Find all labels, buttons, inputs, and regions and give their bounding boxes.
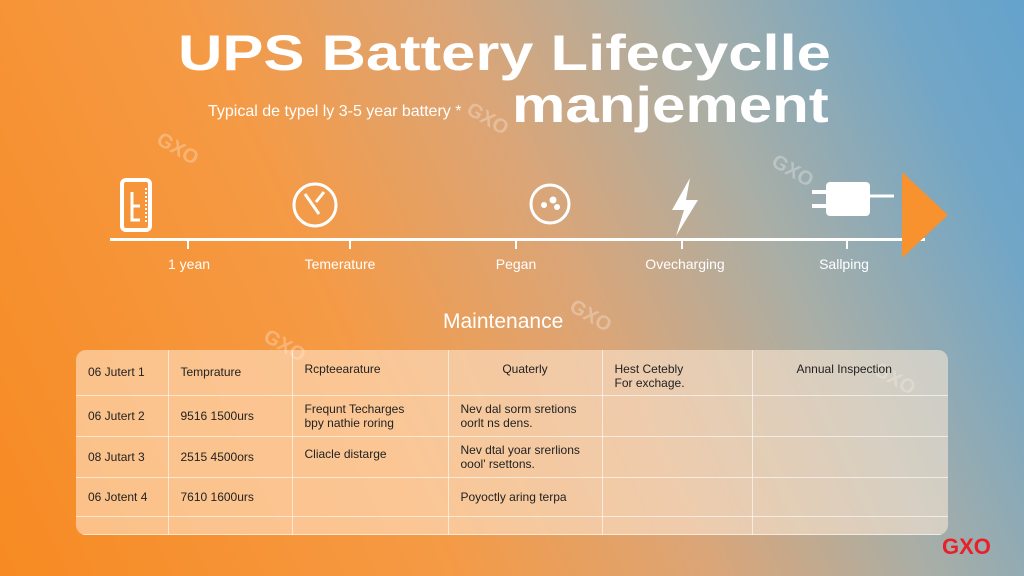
icon: lightning xyxy=(672,178,698,236)
maintenance table: Temprature xyxy=(180,365,241,379)
maintenance table: oorlt ns dens. xyxy=(460,416,533,430)
maintenance table: Nev dtal yoar srerlions xyxy=(460,442,580,456)
text: GXO xyxy=(463,98,512,140)
timeline: Pegan xyxy=(496,256,536,272)
text: GXO xyxy=(870,358,919,400)
timeline: Temerature xyxy=(305,256,375,272)
logo: GXO xyxy=(942,534,991,559)
maintenance table: 08 Jutart 3 xyxy=(88,450,145,464)
maintenance table: 9516 1500urs xyxy=(180,408,254,422)
icon: battery xyxy=(120,178,152,232)
maintenance table: Frequnt Techarges xyxy=(304,402,404,416)
text: GXO xyxy=(768,150,817,192)
maintenance table: 06 Jutert 2 xyxy=(88,408,145,422)
timeline: Sallping xyxy=(819,256,869,272)
watermarks xyxy=(153,98,919,400)
arrow head xyxy=(902,172,948,258)
maintenance table: 2515 4500ors xyxy=(180,450,254,464)
maintenance table: Cliacle distarge xyxy=(304,446,387,460)
maintenance table: Poyoctly aring terpa xyxy=(460,490,567,504)
maintenance table: oool' rsettons. xyxy=(460,456,535,470)
maintenance table: 06 Jutert 1 xyxy=(88,365,145,379)
timeline: Ovecharging xyxy=(645,256,725,272)
section heading: Maintenance xyxy=(443,310,563,333)
text: GXO xyxy=(566,295,615,337)
subtitle: Typical de typel ly 3-5 year battery * xyxy=(208,103,461,120)
timeline xyxy=(110,172,948,272)
icon: plug xyxy=(812,182,894,216)
title: UPS Battery Lifecyclle xyxy=(178,25,831,81)
maintenance table: Annual Inspection xyxy=(796,362,892,376)
maintenance table: Hest Cetebly xyxy=(614,362,683,376)
icon: temperature gauge xyxy=(292,182,338,228)
maintenance table: bpy nathie roring xyxy=(304,416,394,430)
maintenance table: 7610 1600urs xyxy=(180,490,254,504)
text: GXO xyxy=(260,325,309,367)
maintenance table: Rcpteearature xyxy=(304,362,381,376)
title line 2: manjement xyxy=(512,77,829,133)
timeline: 1 yean xyxy=(168,256,210,272)
maintenance table: For exchage. xyxy=(614,376,685,390)
maintenance table: Quaterly xyxy=(502,362,548,376)
maintenance table xyxy=(76,350,948,535)
icon: pegan xyxy=(530,184,570,224)
text: GXO xyxy=(153,128,202,170)
maintenance table: 06 Jotent 4 xyxy=(88,490,147,504)
maintenance table: Nev dal sorm sretions xyxy=(460,402,577,416)
